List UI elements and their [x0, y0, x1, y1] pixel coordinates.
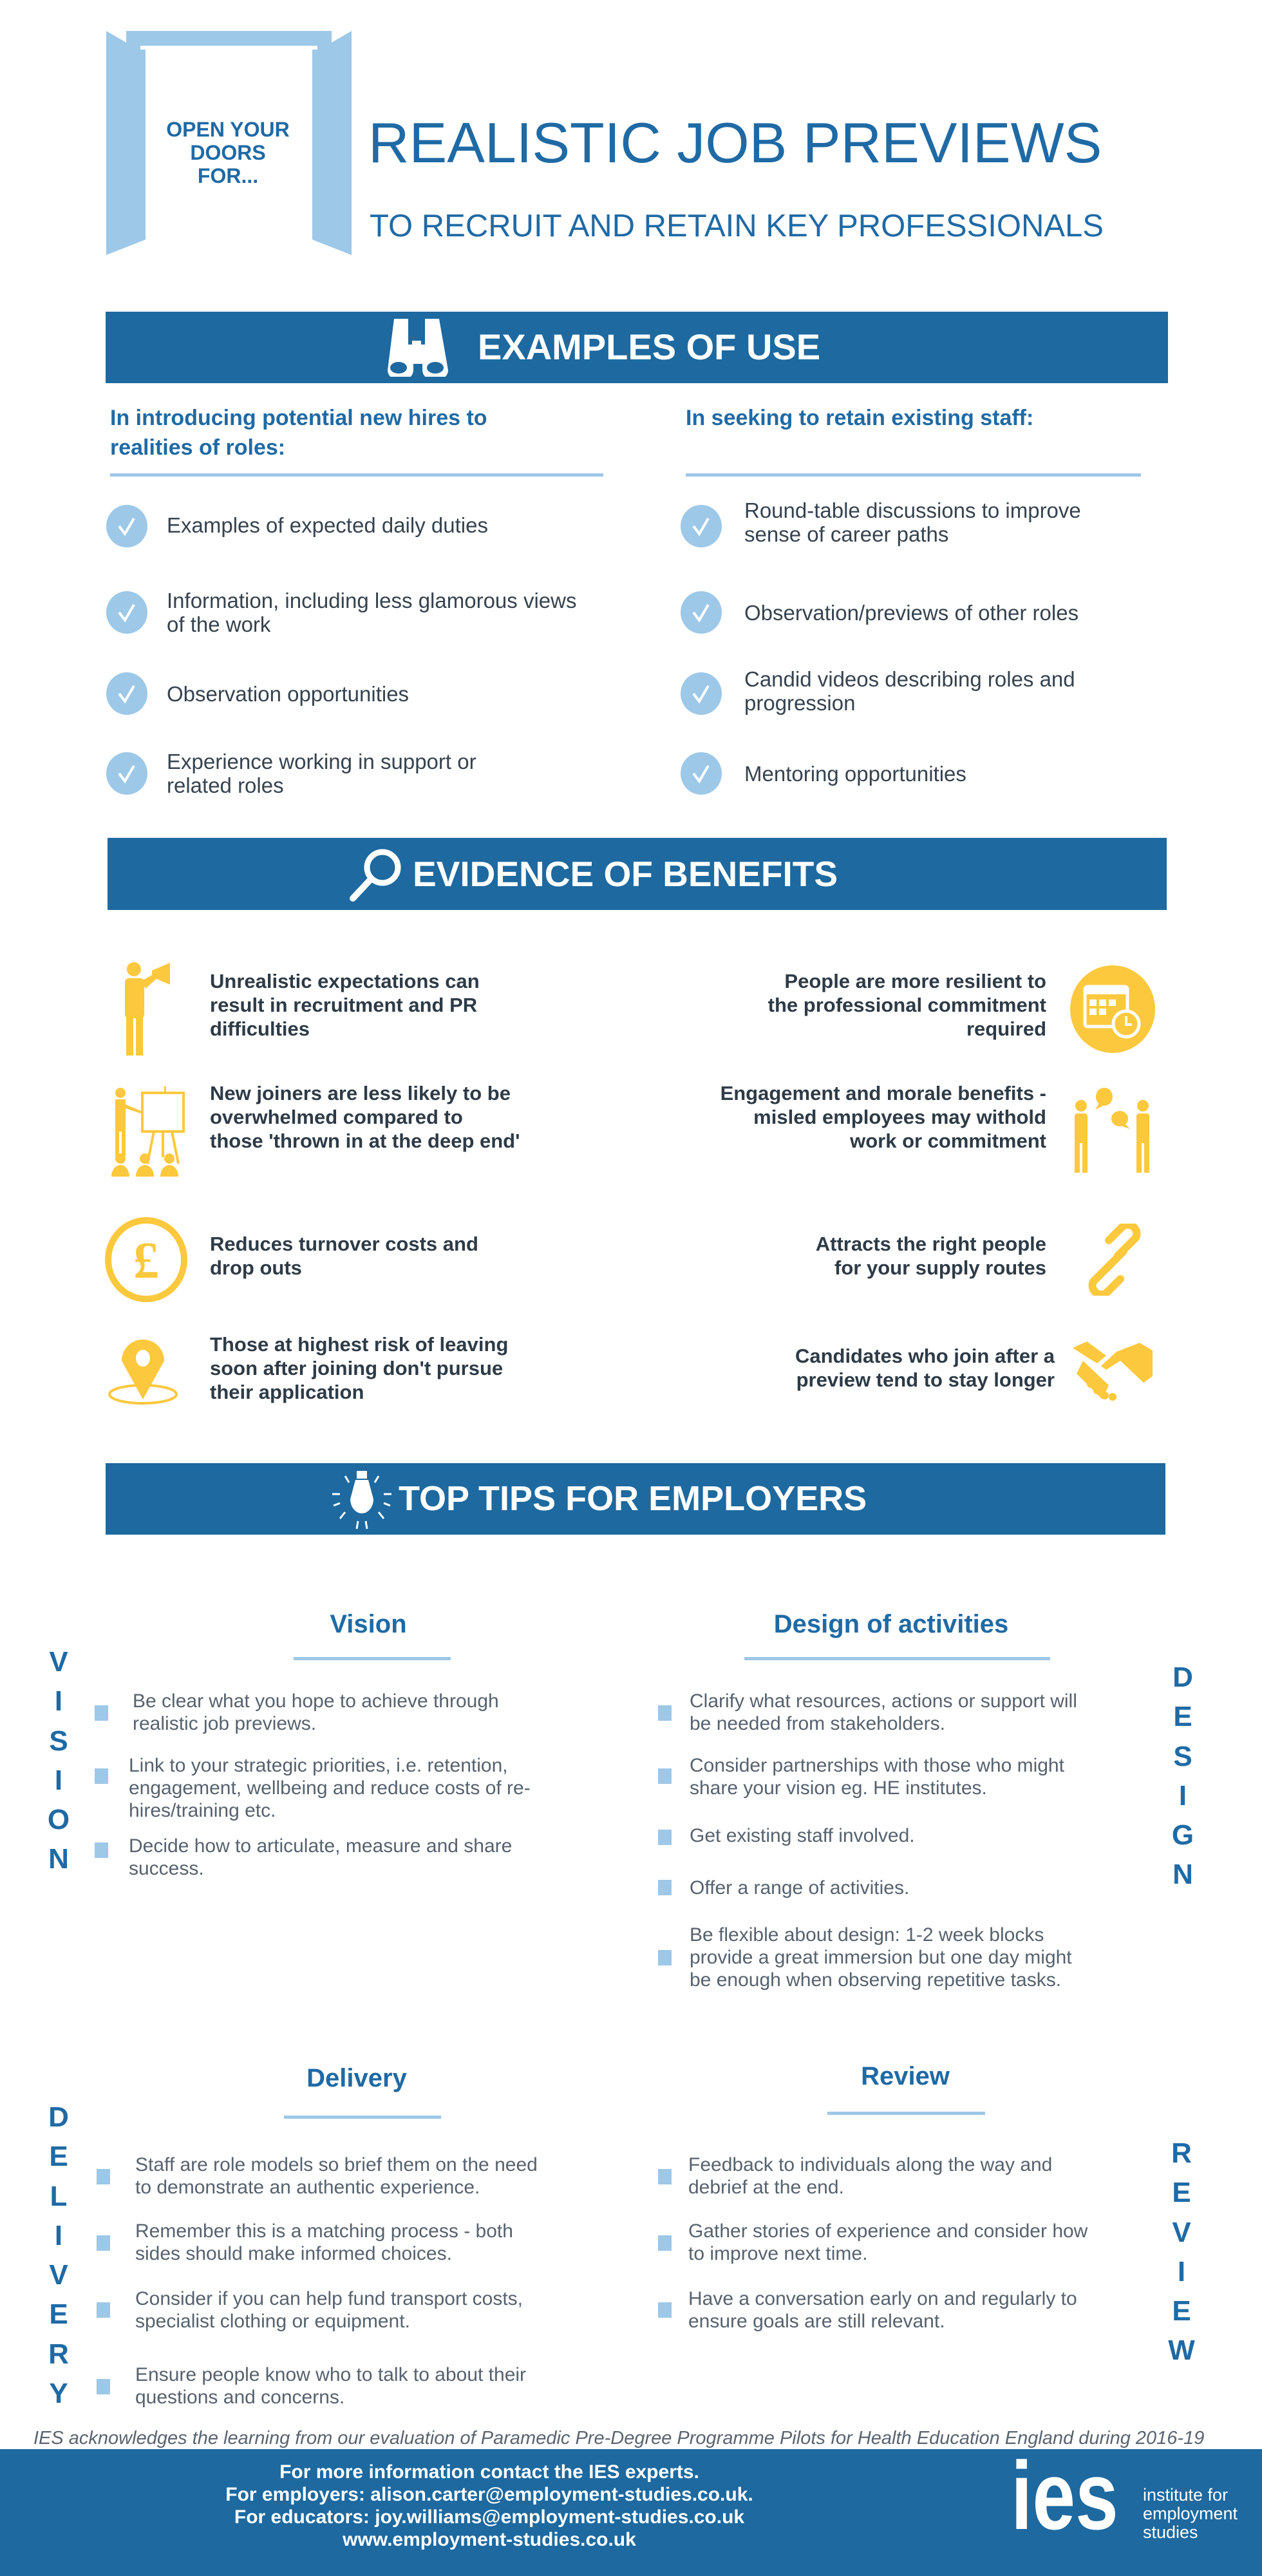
icon: light bulb	[332, 1471, 391, 1529]
text: those 'thrown in at the deep end'	[210, 1130, 520, 1152]
vertical word: VISION: I	[55, 1765, 62, 1796]
vertical word: DESIGN: D	[1173, 1662, 1193, 1693]
contact text	[200, 2461, 779, 2551]
text: misled employees may withold	[753, 1106, 1046, 1128]
text: open your doors for	[166, 118, 290, 187]
icon: conversation	[1075, 1088, 1149, 1173]
vertical word: DELIVERY: V	[49, 2259, 68, 2291]
banner: evidence of benefits	[108, 838, 1167, 910]
banner title: EXAMPLES OF USE	[478, 327, 820, 367]
text: Those at highest risk of leaving	[210, 1333, 508, 1356]
footnote: IES acknowledges the learning from our evaluation of Paramedic Pre-Degree Programme Pilots for Health Education England during 2016-19	[33, 2428, 1204, 2448]
vertical word: DESIGN: G	[1172, 1819, 1194, 1851]
vertical word: DELIVERY: R	[48, 2338, 69, 2370]
text: required	[966, 1018, 1046, 1040]
tip items: be needed from stakeholders.	[690, 1713, 945, 1734]
icon: door frame	[106, 31, 352, 255]
tip items: Staff are role models so brief them on the need	[135, 2154, 538, 2175]
heading: retain staff: In seeking to retain existing staff:	[686, 406, 1033, 430]
contact text: For more information contact the IES experts.	[279, 2461, 699, 2483]
vertical word: DESIGN	[1163, 1658, 1202, 1895]
benefit: stay longer	[795, 1341, 1153, 1401]
title: REALISTIC JOB PREVIEWS	[368, 111, 1102, 175]
heading: Vision	[330, 1610, 407, 1638]
text: open your doors for: OPEN YOUR	[166, 118, 290, 141]
item: Examples of expected daily duties	[167, 513, 488, 537]
list: new hires examples	[106, 505, 576, 797]
vertical word: REVIEW: V	[1172, 2217, 1191, 2248]
heading: Delivery	[306, 2064, 407, 2092]
text: preview tend to stay longer	[796, 1368, 1055, 1391]
vertical word: REVIEW: E	[1172, 2177, 1191, 2208]
text: result in recruitment and PR	[210, 994, 477, 1016]
vertical word: REVIEW: E	[1172, 2295, 1191, 2327]
vertical word: DELIVERY: D	[48, 2101, 69, 2133]
vertical word: DELIVERY: I	[55, 2220, 62, 2251]
text	[720, 1082, 1046, 1152]
tips panel: design	[644, 1610, 1223, 2009]
text	[816, 1233, 1046, 1279]
tip items: Have a conversation early on and regularly to	[688, 2288, 1077, 2309]
text: open your doors for: FOR...	[198, 164, 258, 187]
tip items: engagement, wellbeing and reduce costs of re-	[129, 1777, 531, 1799]
benefit: new joiners	[111, 1082, 520, 1177]
vertical word: DELIVERY: E	[49, 2141, 68, 2172]
benefit: turnover costs	[105, 1217, 478, 1302]
icon: person with megaphone	[125, 962, 170, 1056]
subtitle: TO RECRUIT AND RETAIN KEY PROFESSIONALS	[370, 209, 1104, 243]
heading: Review	[861, 2062, 950, 2090]
heading: new hires: realities of roles:	[110, 435, 285, 460]
item	[106, 589, 576, 636]
text	[210, 1082, 520, 1152]
vertical word: DESIGN: I	[1179, 1780, 1187, 1812]
tip items	[95, 1690, 610, 1883]
logo: ies: employment	[1143, 2504, 1238, 2523]
list: retain staff examples	[681, 498, 1081, 795]
contact text: For employers: alison.carter@employment-studies.co.uk.	[225, 2484, 753, 2505]
logo: ies: studies	[1143, 2523, 1198, 2542]
vertical word: REVIEW: R	[1171, 2137, 1192, 2169]
item: Information, including less glamorous views	[167, 589, 576, 612]
logo: ies: ies	[1011, 2441, 1118, 2550]
banner: top tips	[106, 1463, 1165, 1535]
tip items: to demonstrate an authentic experience.	[135, 2177, 480, 2198]
icon: chain link	[1088, 1224, 1141, 1296]
vertical word: DESIGN: N	[1173, 1859, 1193, 1890]
text: the professional commitment	[768, 994, 1046, 1016]
vertical word: DESIGN: S	[1173, 1741, 1192, 1772]
tip items: Be flexible about design: 1-2 week blocks	[690, 1924, 1044, 1946]
heading: new hires	[110, 406, 487, 460]
text	[210, 1333, 508, 1403]
icon: calendar clock	[1070, 965, 1155, 1053]
tip items: specialist clothing or equipment.	[135, 2311, 410, 2332]
text: Attracts the right people	[816, 1233, 1046, 1255]
item: sense of career paths	[744, 522, 948, 546]
text: for your supply routes	[834, 1256, 1046, 1279]
text: overwhelmed compared to	[210, 1106, 463, 1128]
tip items: Link to your strategic priorities, i.e. retention,	[129, 1755, 508, 1776]
item	[681, 752, 966, 795]
tip items: success.	[129, 1858, 204, 1879]
item	[106, 505, 488, 547]
item: Observation opportunities	[167, 681, 409, 706]
item: Candid videos describing roles and	[744, 667, 1075, 691]
footer band	[0, 2449, 1262, 2576]
logo: ies	[1011, 2456, 1262, 2559]
vertical word: VISION: S	[49, 1725, 68, 1757]
heading: Design of activities	[774, 1610, 1008, 1638]
contact text: www.employment-studies.co.uk	[343, 2529, 636, 2550]
text: soon after joining don't pursue	[210, 1357, 503, 1379]
tip items: Clarify what resources, actions or support will	[690, 1690, 1077, 1712]
item: Round-table discussions to improve	[744, 498, 1081, 522]
banner: examples of use	[106, 312, 1168, 383]
item	[681, 498, 1081, 547]
item	[681, 667, 1075, 715]
tip items: provide a great immersion but one day might	[690, 1947, 1072, 1968]
vertical word: REVIEW	[1162, 2134, 1201, 2371]
item: Observation/previews of other roles	[744, 600, 1078, 625]
text: work or commitment	[850, 1130, 1046, 1152]
tip items: Consider if you can help fund transport costs,	[135, 2288, 523, 2309]
benefit: right people	[816, 1224, 1141, 1296]
tip items: debrief at the end.	[688, 2177, 844, 2198]
tip items	[658, 2154, 1147, 2347]
icon: handshake	[1073, 1341, 1153, 1401]
vertical word: DELIVERY: Y	[49, 2378, 68, 2409]
vertical word: VISION: O	[48, 1804, 70, 1835]
vertical word: VISION	[39, 1642, 78, 1879]
tip items: Consider partnerships with those who might	[690, 1755, 1064, 1776]
benefit: highest risk	[108, 1333, 508, 1405]
vertical word: DESIGN: E	[1173, 1701, 1192, 1732]
banner title: TOP TIPS FOR EMPLOYERS	[399, 1479, 867, 1518]
text: difficulties	[210, 1018, 310, 1040]
item	[106, 672, 409, 715]
item: Experience working in support or	[167, 750, 476, 773]
icon: magnifier	[350, 849, 400, 902]
icon: location pin	[108, 1340, 178, 1405]
text	[795, 1345, 1055, 1391]
vertical word: REVIEW: W	[1168, 2334, 1195, 2366]
logo: ies: institute for	[1143, 2485, 1228, 2505]
benefit: resilient	[768, 965, 1155, 1053]
item	[681, 591, 1078, 634]
item	[106, 750, 476, 797]
tip items: share your vision eg. HE institutes.	[690, 1777, 987, 1799]
tip items: Remember this is a matching process - both	[135, 2221, 513, 2242]
item: progression	[744, 691, 855, 715]
text	[768, 970, 1046, 1040]
tip items: Offer a range of activities.	[690, 1877, 909, 1899]
tip items: realistic job previews.	[133, 1713, 316, 1734]
item: of the work	[167, 612, 270, 636]
text: New joiners are less likely to be	[210, 1082, 511, 1104]
tip items: Gather stories of experience and consider how	[688, 2221, 1088, 2242]
tips panel: vision	[39, 1610, 618, 1880]
tip items: Decide how to articulate, measure and share	[129, 1835, 512, 1857]
item: Mentoring opportunities	[744, 761, 966, 786]
text: Candidates who join after a	[795, 1345, 1055, 1367]
icon: presenter with audience	[111, 1086, 185, 1177]
benefit: engagement	[720, 1082, 1149, 1173]
text: People are more resilient to	[784, 970, 1046, 992]
text: Engagement and morale benefits -	[720, 1082, 1046, 1104]
vertical word: VISION: V	[49, 1646, 68, 1678]
tip items: sides should make informed choices.	[135, 2243, 452, 2264]
vertical word: REVIEW: I	[1178, 2256, 1185, 2287]
heading: new hires: In introducing potential new hires to	[110, 406, 487, 430]
text	[210, 970, 480, 1040]
tip items: ensure goals are still relevant.	[688, 2311, 945, 2332]
tip items: questions and concerns.	[135, 2387, 344, 2408]
tip items	[658, 1690, 1147, 2012]
benefit: unrealistic expectations	[125, 962, 480, 1056]
icon: binoculars	[388, 319, 448, 377]
vertical word: DELIVERY: L	[50, 2181, 67, 2212]
vertical word: DELIVERY: E	[49, 2298, 68, 2330]
text: their application	[210, 1381, 364, 1403]
text: Unrealistic expectations can	[210, 970, 480, 992]
text: open your doors for: DOORS	[190, 141, 266, 164]
tips panel: delivery	[39, 2064, 618, 2425]
vertical word: VISION: I	[55, 1685, 62, 1717]
tip items: Get existing staff involved.	[690, 1825, 915, 1846]
text: drop outs	[210, 1256, 302, 1279]
contact text: For educators: joy.williams@employment-studies.co.uk	[234, 2506, 744, 2528]
icon: pound coin	[105, 1217, 187, 1302]
tip items: Be clear what you hope to achieve through	[133, 1690, 499, 1712]
text	[210, 1233, 478, 1279]
tip items: to improve next time.	[688, 2243, 867, 2264]
item: related roles	[167, 773, 284, 797]
text: Reduces turnover costs and	[210, 1233, 478, 1255]
vertical word: DELIVERY	[39, 2098, 78, 2413]
icon: pound coin: £	[133, 1233, 159, 1289]
tips panel: review	[644, 2062, 1223, 2371]
tip items: Feedback to individuals along the way and	[688, 2154, 1052, 2175]
tip items: Ensure people know who to talk to about their	[135, 2364, 526, 2385]
banner title: EVIDENCE OF BENEFITS	[413, 854, 838, 894]
tip items: be enough when observing repetitive tasks.	[690, 1969, 1061, 1991]
tip items: hires/training etc.	[129, 1800, 276, 1821]
vertical word: VISION: N	[48, 1843, 69, 1875]
tip items	[97, 2154, 612, 2424]
